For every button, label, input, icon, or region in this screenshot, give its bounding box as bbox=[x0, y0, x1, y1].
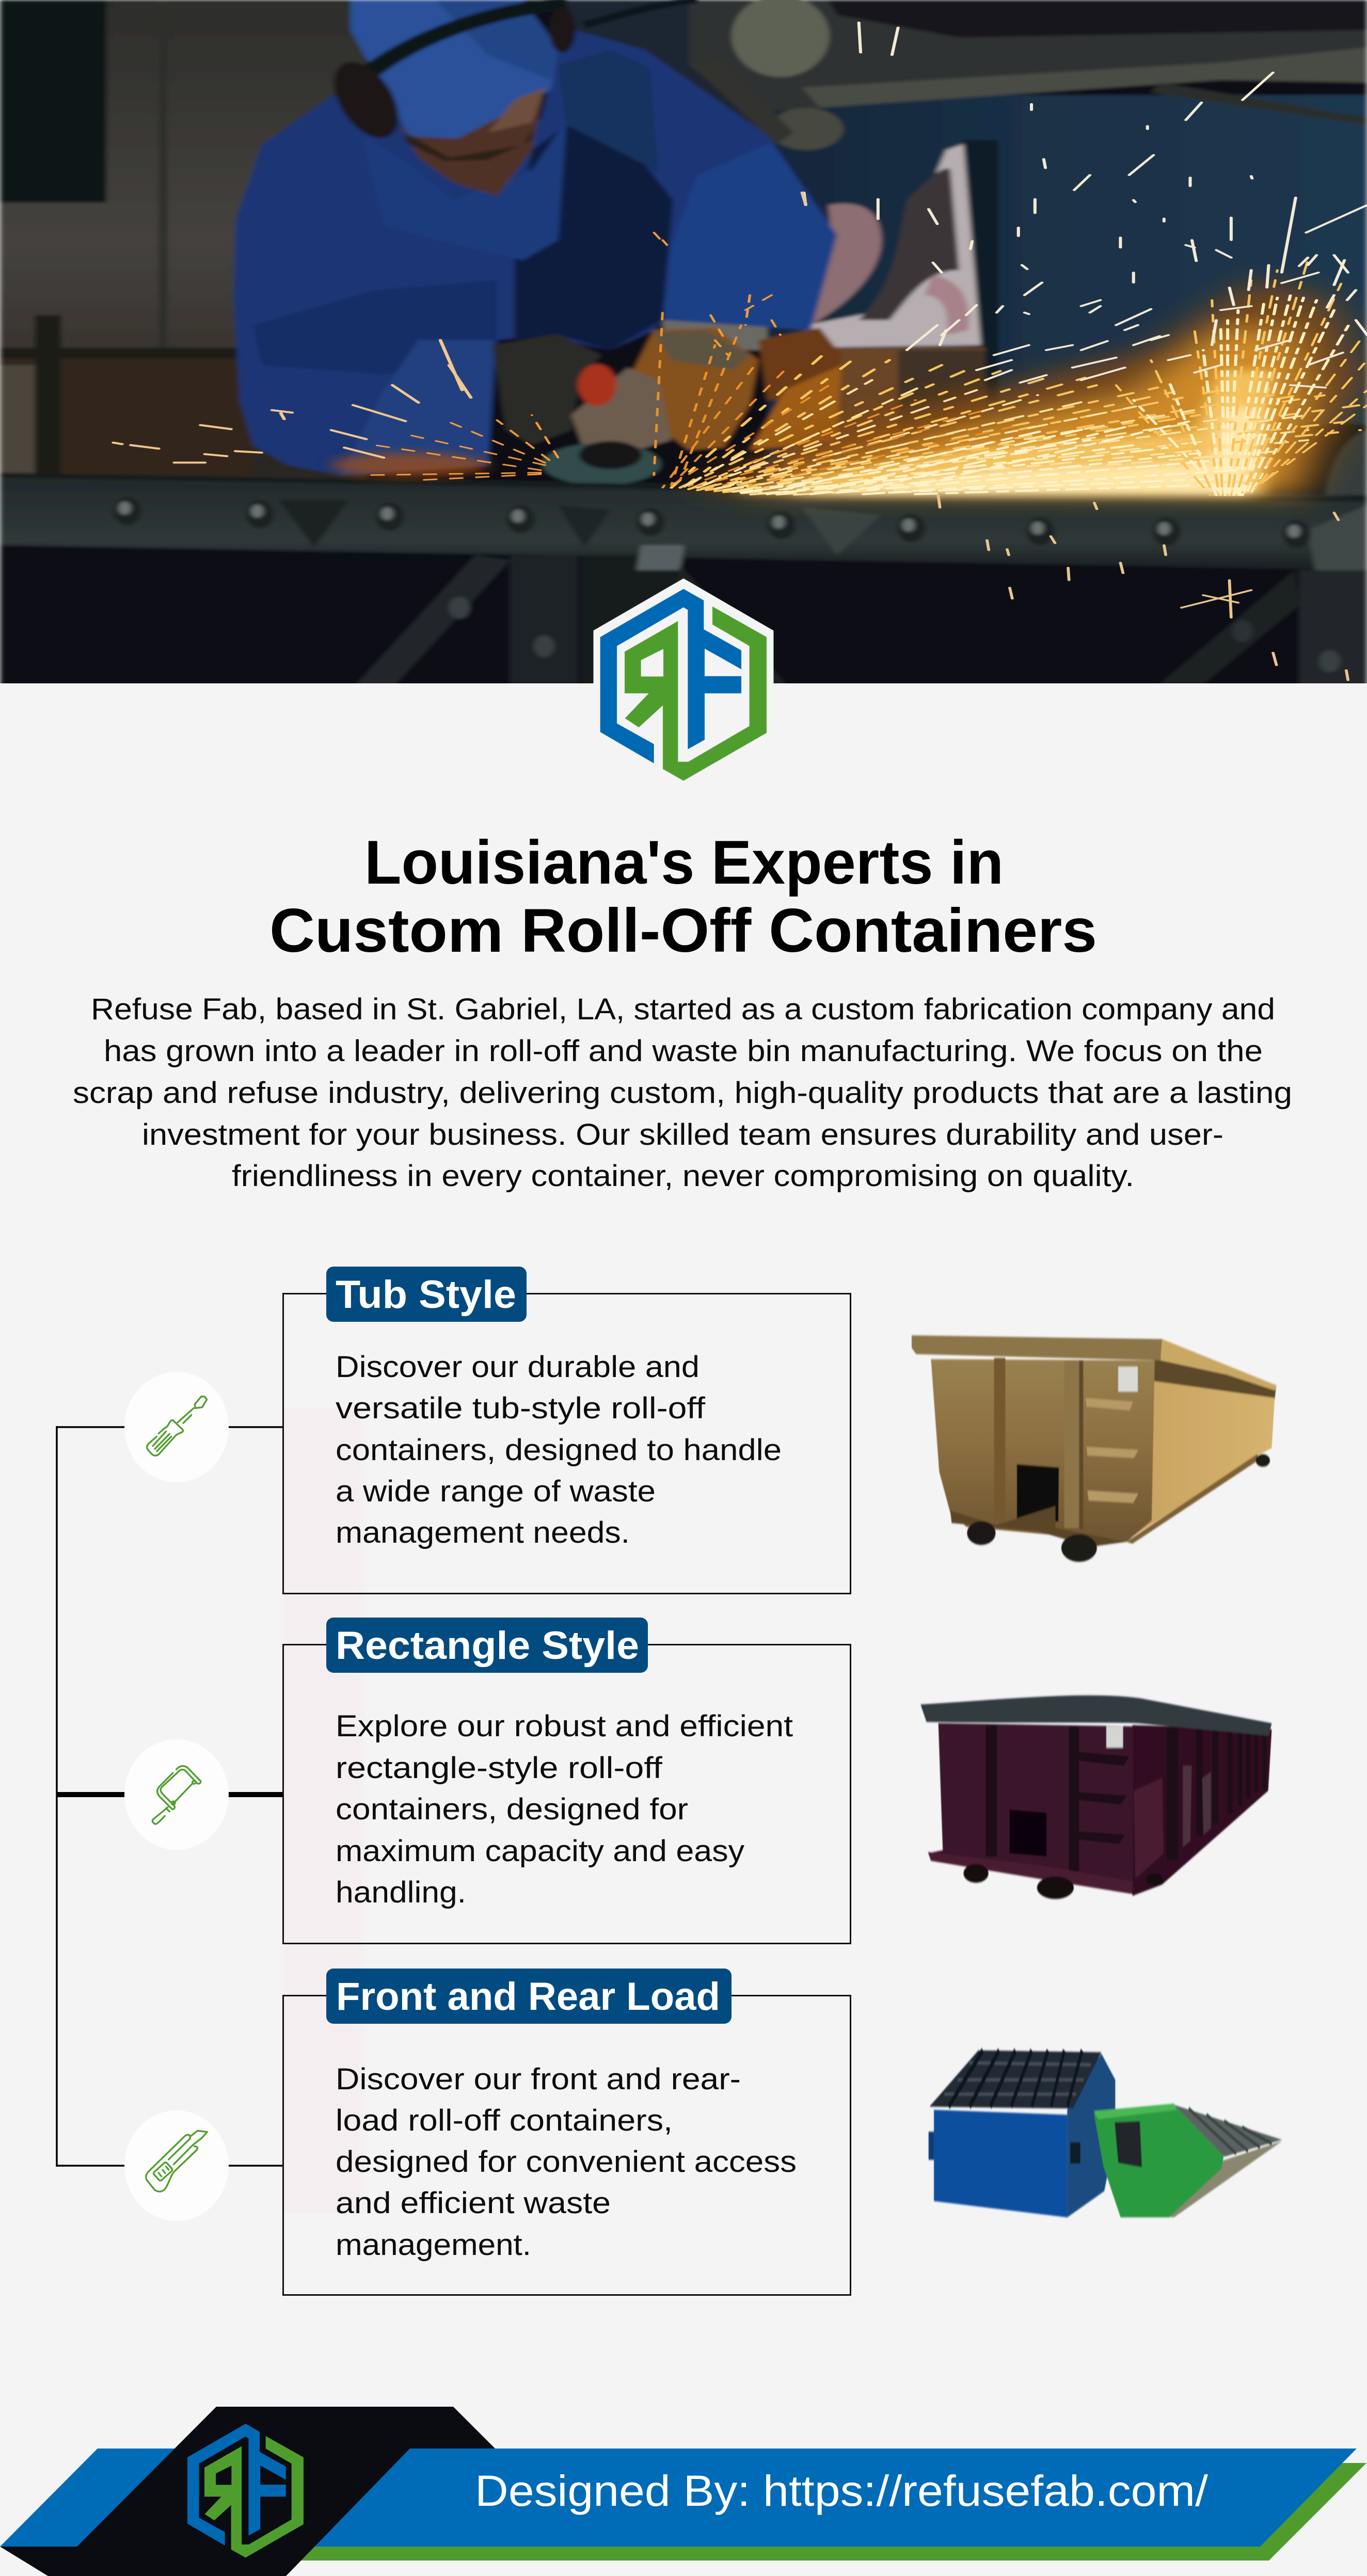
falling sparks over beam bbox=[938, 495, 1348, 680]
body: tub style: containers, designed to handle bbox=[336, 1433, 782, 1467]
body: rectangle style: Explore our robust and efficient bbox=[336, 1709, 793, 1743]
body: tub style: a wide range of waste bbox=[336, 1475, 656, 1508]
body: rectangle style: containers, designed for bbox=[336, 1793, 688, 1826]
faint pink background strip bbox=[284, 1408, 365, 2213]
title bbox=[269, 828, 1097, 965]
body: front and rear load: designed for convenient access bbox=[336, 2145, 797, 2179]
sparks near worker arm bbox=[114, 193, 806, 462]
spark fountain at right bbox=[1116, 260, 1367, 495]
badge: front and rear load: Front and Rear Load bbox=[336, 1975, 720, 2019]
main logo: RF hexagon bbox=[593, 579, 773, 787]
body: tub style: management needs. bbox=[336, 1516, 630, 1549]
intro paragraph: friendliness in every container, never compromising on quality. bbox=[232, 1159, 1134, 1193]
body: rectangle style bbox=[336, 1709, 793, 1909]
panel: tub style bbox=[283, 1267, 851, 1594]
icon: screwdriver bbox=[124, 1372, 229, 1482]
title: Custom Roll-Off Containers bbox=[269, 896, 1097, 965]
free sparks on blue wall bbox=[804, 23, 1367, 388]
product image: rectangle style container bbox=[920, 1695, 1271, 1899]
body: front and rear load bbox=[336, 2062, 797, 2262]
intro paragraph: investment for your business. Our skilled team ensures durability and user- bbox=[142, 1118, 1223, 1151]
spark fan from grinder bbox=[654, 310, 1360, 495]
body: front and rear load: Discover our front and rear- bbox=[336, 2062, 741, 2096]
footer logo bbox=[187, 2424, 304, 2557]
connector lines bbox=[57, 1426, 282, 2167]
badge: rectangle style: Rectangle Style bbox=[336, 1624, 639, 1668]
intro paragraph bbox=[73, 993, 1292, 1193]
badge: tub style bbox=[326, 1267, 527, 1322]
intro paragraph: Refuse Fab, based in St. Gabriel, LA, started as a custom fabrication company and bbox=[91, 993, 1275, 1026]
icon: utility knife bbox=[124, 2110, 229, 2221]
badge: tub style: Tub Style bbox=[336, 1273, 516, 1317]
footer green shadow bbox=[296, 2463, 1366, 2561]
footer credit text: Designed By: https://refusefab.com/ bbox=[475, 2467, 1209, 2515]
intro paragraph: has grown into a leader in roll-off and waste bin manufacturing. We focus on the bbox=[104, 1034, 1263, 1068]
product image: tub style container bbox=[912, 1335, 1277, 1562]
body: tub style: Discover our durable and bbox=[336, 1350, 700, 1384]
hero photo: welder grinding steel with sparks bbox=[0, 0, 1367, 700]
footer blue band bbox=[0, 2449, 1357, 2547]
panel: front and rear load bbox=[283, 1969, 851, 2295]
icon: hacksaw bbox=[124, 1739, 229, 1850]
body: rectangle style: maximum capacity and easy bbox=[336, 1834, 744, 1868]
body: front and rear load: and efficient waste bbox=[336, 2186, 611, 2220]
title: Louisiana's Experts in bbox=[364, 828, 1004, 897]
intro paragraph: scrap and refuse industry, delivering custom, high-quality products that are a lasting bbox=[73, 1076, 1292, 1110]
logo blue F and frame bbox=[600, 589, 741, 763]
body: rectangle style: handling. bbox=[336, 1876, 466, 1909]
logo backing hexagon bbox=[593, 579, 773, 787]
footer black fold and logo panel bbox=[0, 2407, 495, 2576]
body: rectangle style: rectangle-style roll-off bbox=[336, 1751, 663, 1785]
body: front and rear load: load roll-off containers, bbox=[336, 2104, 673, 2137]
product image: front and rear load bins bbox=[929, 2051, 1282, 2217]
body: tub style: versatile tub-style roll-off bbox=[336, 1391, 706, 1425]
logo green R and frame bbox=[625, 606, 767, 781]
panel: rectangle style bbox=[283, 1618, 851, 1944]
footer banner bbox=[0, 2407, 1366, 2576]
body: front and rear load: management. bbox=[336, 2228, 531, 2262]
body: tub style bbox=[336, 1350, 782, 1549]
